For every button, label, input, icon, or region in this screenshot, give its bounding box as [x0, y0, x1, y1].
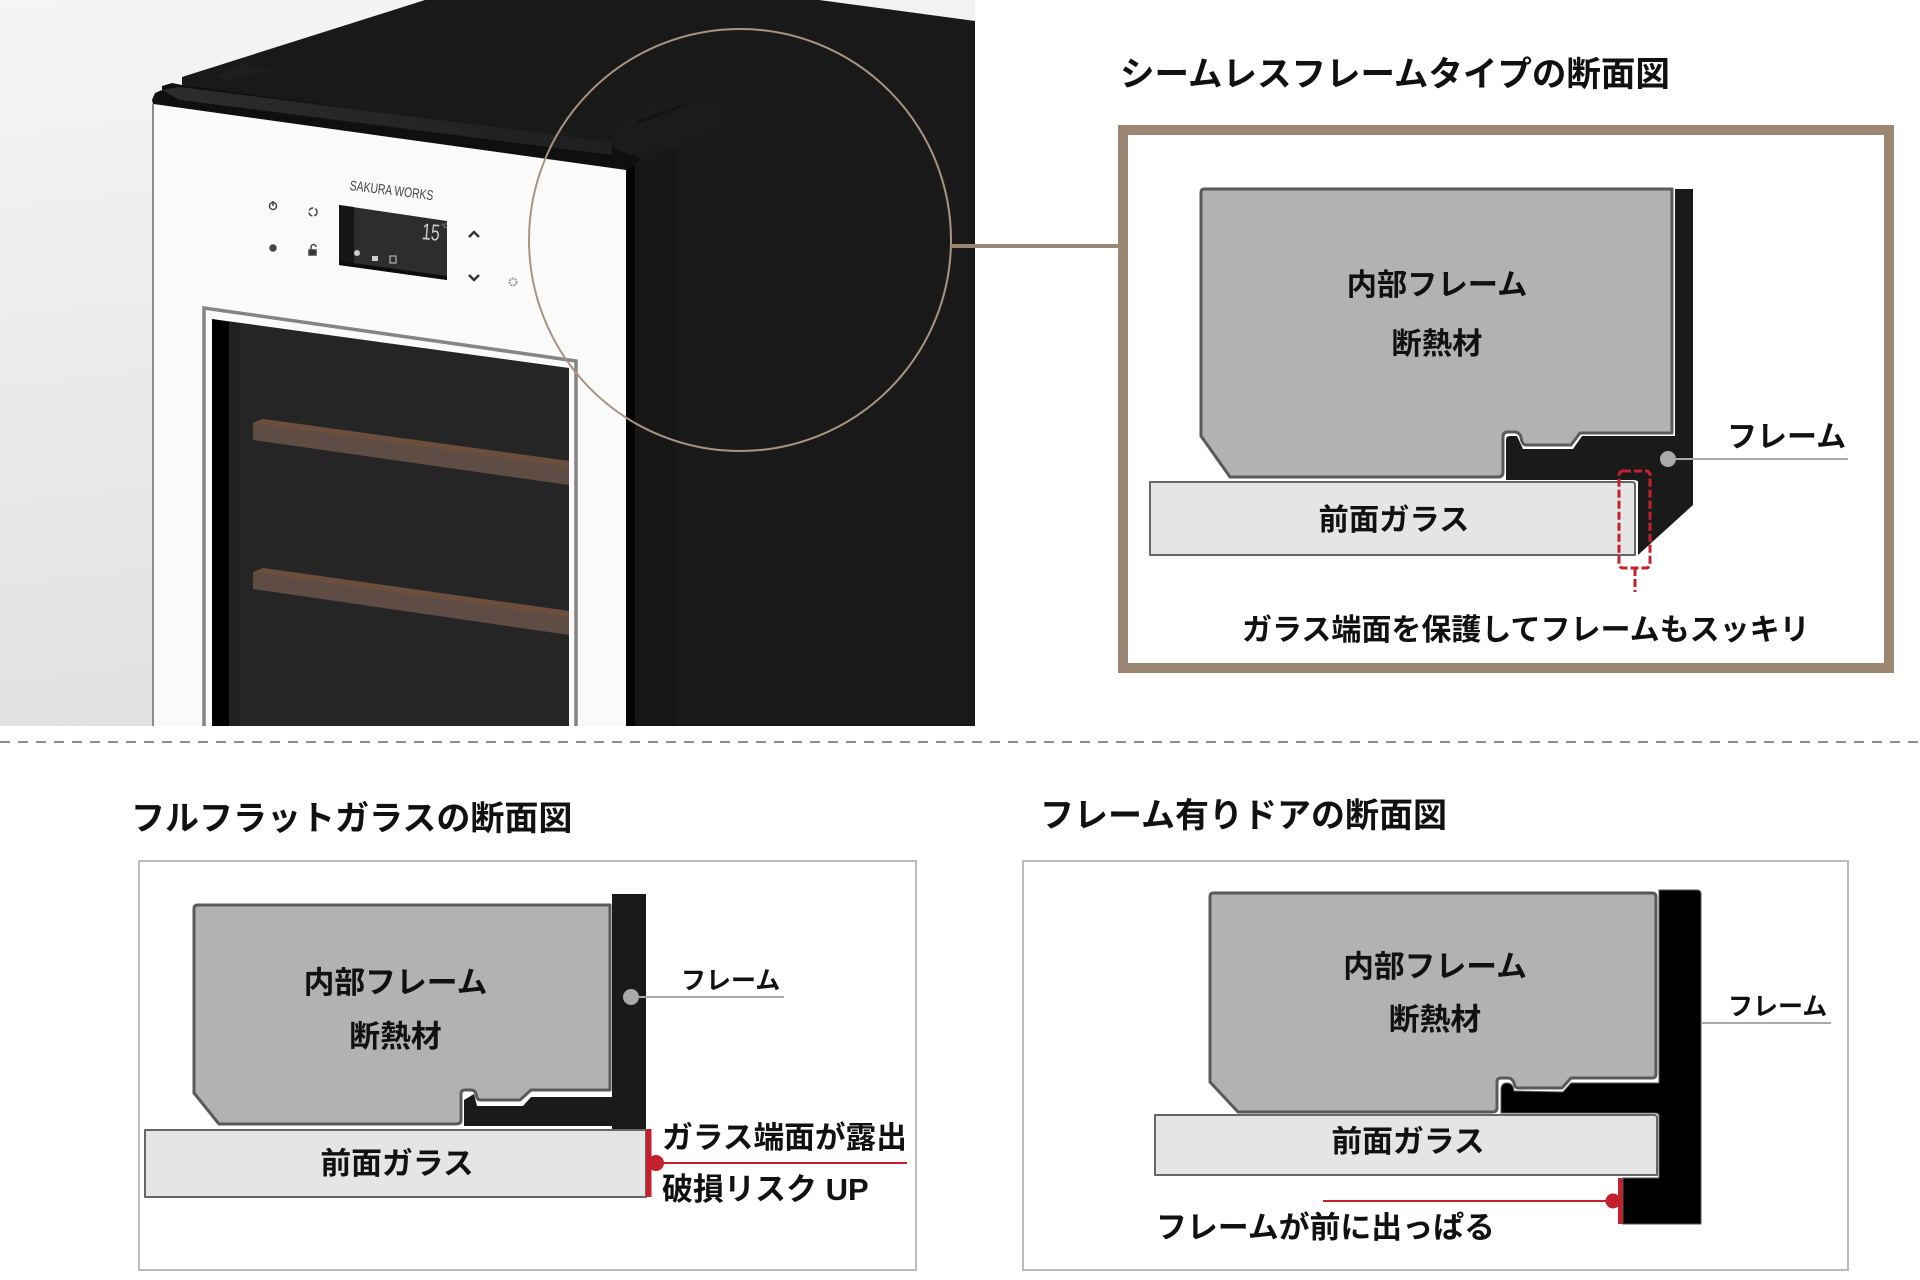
photo: wine cooler close-up	[0, 0, 975, 726]
front glass	[1155, 1115, 1657, 1175]
wooden shelf upper	[253, 419, 569, 485]
caption: ガラス端面を保護してフレームもスッキリ	[1242, 614, 1810, 647]
top surface tag	[217, 63, 273, 80]
door side strip	[625, 147, 675, 726]
red marker: exposed glass edge	[646, 1129, 907, 1197]
top front trim base	[152, 83, 640, 171]
wooden shelf lower	[253, 568, 569, 635]
label: insulation: 断熱材	[1389, 1002, 1481, 1037]
callout: frame	[623, 967, 784, 1005]
white door panel	[153, 104, 626, 726]
callout: frame: フレーム	[1728, 993, 1827, 1021]
red dashed highlight	[1619, 471, 1650, 592]
heading: seamless frame section: シームレスフレームタイプの断面図	[1120, 56, 1670, 94]
inner frame shape	[1201, 189, 1672, 477]
warning text: ガラス端面が露出	[662, 1120, 907, 1155]
temperature reading: 15	[421, 218, 441, 246]
label: inner frame: 内部フレーム	[1347, 268, 1527, 302]
black frame	[1501, 890, 1701, 1224]
panel: full flat glass section	[139, 861, 916, 1270]
window outline	[204, 308, 576, 726]
top front trim highlight band	[162, 87, 612, 155]
label: inner frame: 内部フレーム	[304, 965, 487, 1000]
front glass	[1150, 482, 1635, 555]
window interior	[212, 319, 569, 726]
label: insulation: 断熱材	[1392, 327, 1482, 361]
panel: seamless frame section	[1123, 130, 1889, 668]
panel: framed door section	[1023, 861, 1848, 1270]
inner frame shape	[1210, 893, 1656, 1112]
label: front glass: 前面ガラス	[320, 1146, 474, 1181]
risk text: 破損リスク UP	[662, 1172, 869, 1207]
label: front glass: 前面ガラス	[1331, 1124, 1485, 1159]
label: front glass: 前面ガラス	[1319, 503, 1469, 537]
callout: frame	[1660, 421, 1848, 467]
caption: フレームが前に出っぱる	[1156, 1210, 1495, 1245]
display panel	[339, 205, 448, 280]
heading: framed door section: フレーム有りドアの断面図	[1040, 797, 1447, 835]
display icons	[354, 250, 396, 263]
black frame	[1506, 189, 1693, 555]
divider	[0, 741, 1920, 743]
front glass	[145, 1130, 646, 1197]
callout: frame: フレーム	[681, 967, 780, 995]
black frame	[464, 894, 646, 1129]
label: insulation: 断熱材	[349, 1019, 442, 1054]
control icons	[270, 201, 516, 286]
unit: °C	[441, 224, 448, 230]
callout: frame: フレーム	[1727, 421, 1846, 454]
red marker: protruding frame	[1323, 1178, 1622, 1224]
heading: full flat glass section: フルフラットガラスの断面図	[131, 800, 572, 838]
magnifier circle	[529, 29, 951, 451]
inner frame shape	[194, 905, 610, 1124]
brand logo: SAKURA WORKS	[349, 177, 434, 203]
connector line from circle to panel	[951, 244, 1120, 248]
label: inner frame: 内部フレーム	[1343, 949, 1527, 984]
hinge	[612, 97, 727, 155]
